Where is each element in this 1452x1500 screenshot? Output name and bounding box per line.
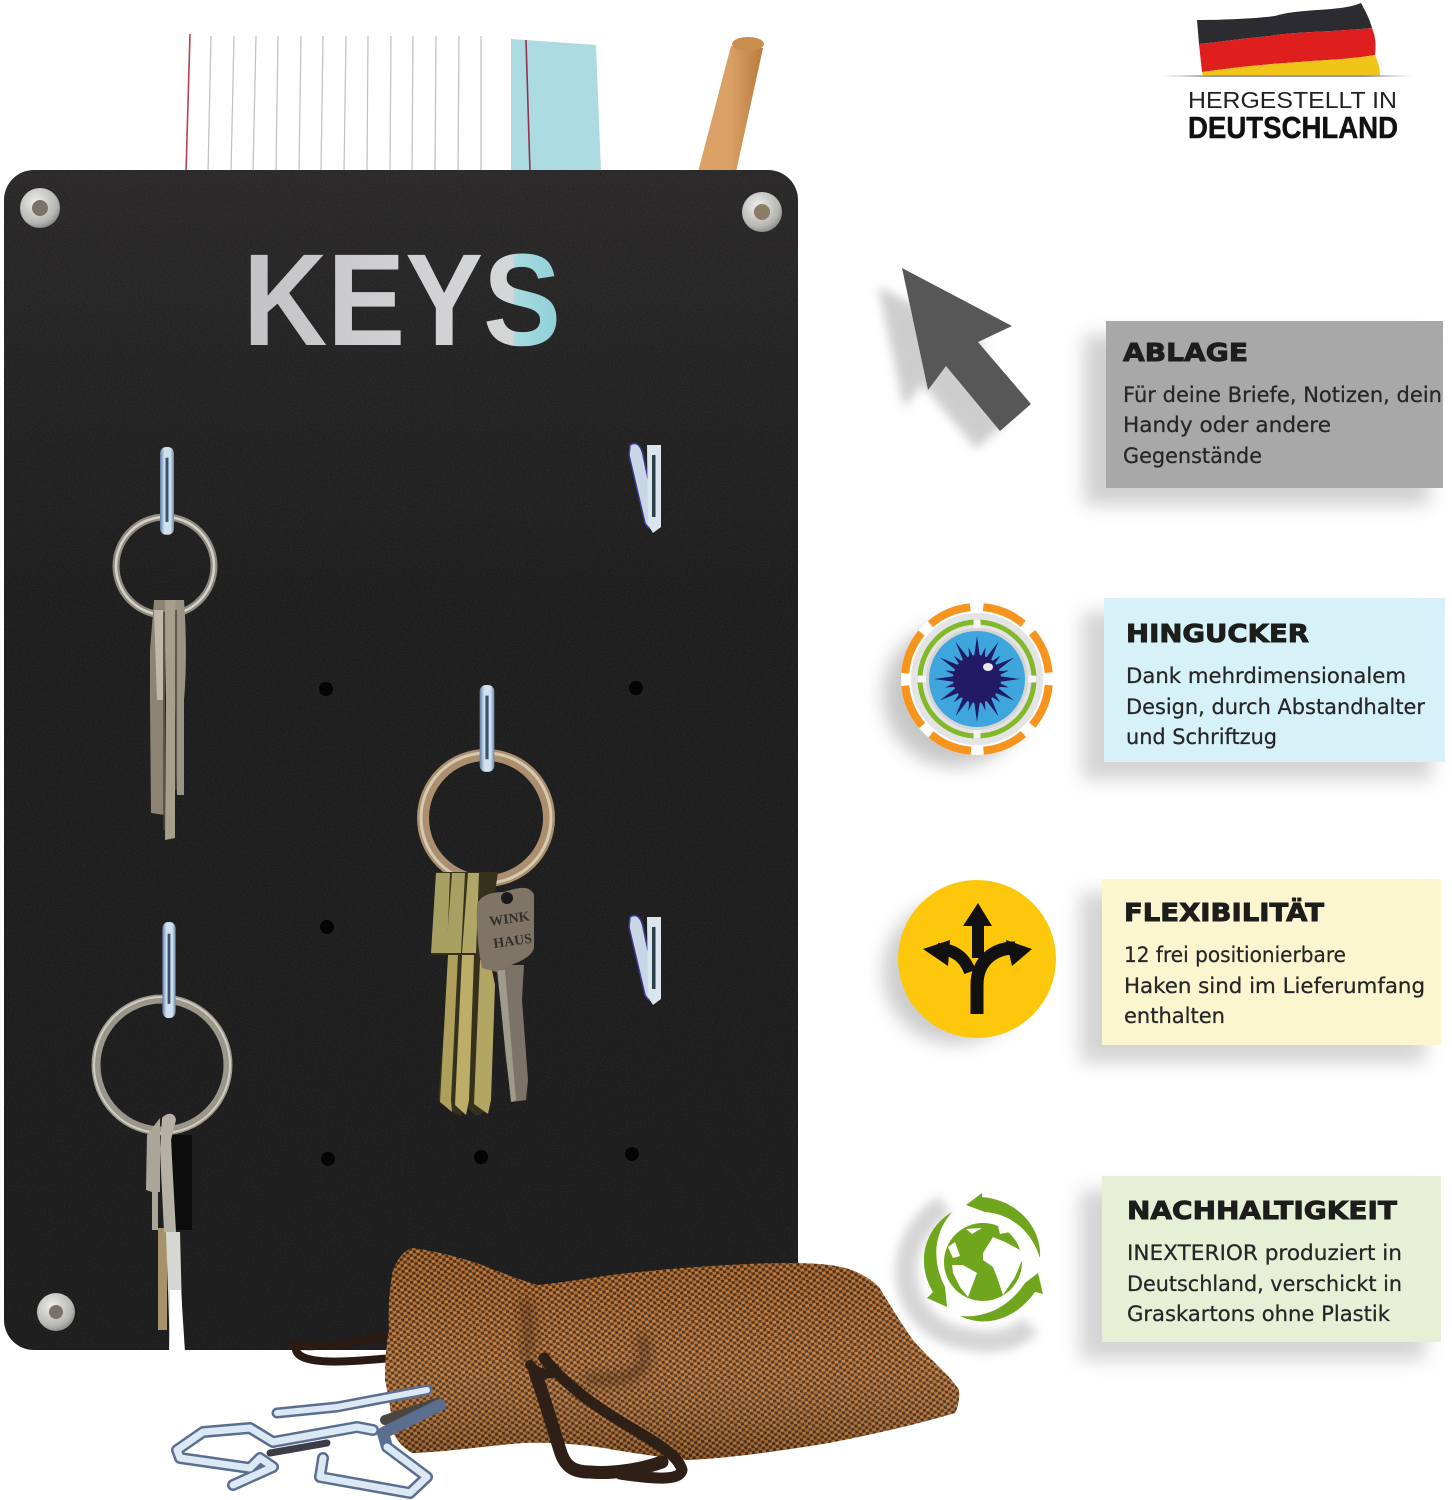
loose hooks (177, 1390, 440, 1493)
hook: lower right (629, 915, 661, 1005)
brass keys (431, 872, 498, 1116)
hook (160, 447, 174, 535)
panel: Ablage: Handy oder andere (1123, 413, 1331, 437)
panel: Nachhaltigkeit: Deutschland, verschickt in (1127, 1272, 1402, 1296)
arrow: top (966, 1193, 1040, 1258)
panel: Ablage: Für deine Briefe, Notizen, dein (1123, 383, 1442, 407)
globe (944, 1223, 1023, 1301)
hook (480, 685, 494, 772)
arrow: pointing to tray (878, 268, 1031, 449)
panel: Ablage (1084, 321, 1443, 505)
keys (150, 600, 186, 840)
hook: top right (629, 443, 661, 533)
wooden pencil (698, 37, 764, 172)
flag: Germany (1160, 3, 1415, 77)
panel: Hingucker: Dank mehrdimensionalem (1126, 664, 1406, 688)
Winkhaus key: HAUS (492, 932, 533, 952)
board holes (319, 681, 643, 1166)
made in Germany text: DEUTSCHLAND (1188, 110, 1398, 145)
hook: rear (277, 1390, 437, 1420)
arrow: left (924, 1212, 952, 1307)
panel: Nachhaltigkeit: Graskartons ohne Plastik (1127, 1302, 1391, 1326)
icon: three-way arrows (883, 880, 1056, 1044)
keyring: bottom-left (94, 922, 230, 1352)
hook: right (320, 1405, 440, 1493)
panel: Hingucker: Design, durch Abstandhalter (1126, 695, 1425, 719)
pouch cord behind (291, 1335, 392, 1362)
hook (162, 922, 176, 1018)
keys (146, 1114, 185, 1352)
panel: Nachhaltigkeit: INEXTERIOR produziert in (1127, 1241, 1402, 1265)
panel: Flexibilität (1080, 879, 1441, 1063)
key fob (172, 1135, 192, 1230)
icon: eye (883, 603, 1053, 767)
panel: Nachhaltigkeit (1080, 1176, 1441, 1360)
icon: recycling globe (906, 1193, 1043, 1341)
Winkhaus key (477, 888, 534, 1102)
panel: Flexibilität: FLEXIBILITÄT (1124, 897, 1324, 927)
arrow: bottom (960, 1273, 1043, 1321)
keyring: top-left (116, 447, 214, 840)
panel: Nachhaltigkeit: NACHHALTIGKEIT (1127, 1196, 1397, 1225)
panel: Ablage: ABLAGE (1123, 338, 1248, 367)
screws (20, 188, 782, 1331)
panel: Hingucker: HINGUCKER (1126, 619, 1309, 648)
index card behind board (186, 34, 506, 174)
key label: WINK (488, 909, 531, 930)
panel: Flexibilität: Haken sind im Lieferumfang (1124, 974, 1425, 998)
panel: Flexibilität: 12 frei positionierbare (1124, 943, 1346, 967)
burlap pouch (385, 1248, 959, 1478)
made in Germany text (1188, 87, 1398, 145)
panel: Hingucker (1082, 598, 1445, 780)
blue note (511, 39, 601, 172)
panel: Hingucker: und Schriftzug (1126, 725, 1277, 749)
drawstring (530, 1358, 682, 1478)
KEYS lettering: KEYS (243, 226, 561, 373)
keyring: centre (421, 685, 551, 1116)
panel: Ablage: Gegenstände (1123, 444, 1262, 468)
made in Germany text: HERGESTELLT IN (1188, 87, 1397, 113)
panel: Flexibilität: enthalten (1124, 1004, 1225, 1028)
hook: left (177, 1427, 373, 1485)
